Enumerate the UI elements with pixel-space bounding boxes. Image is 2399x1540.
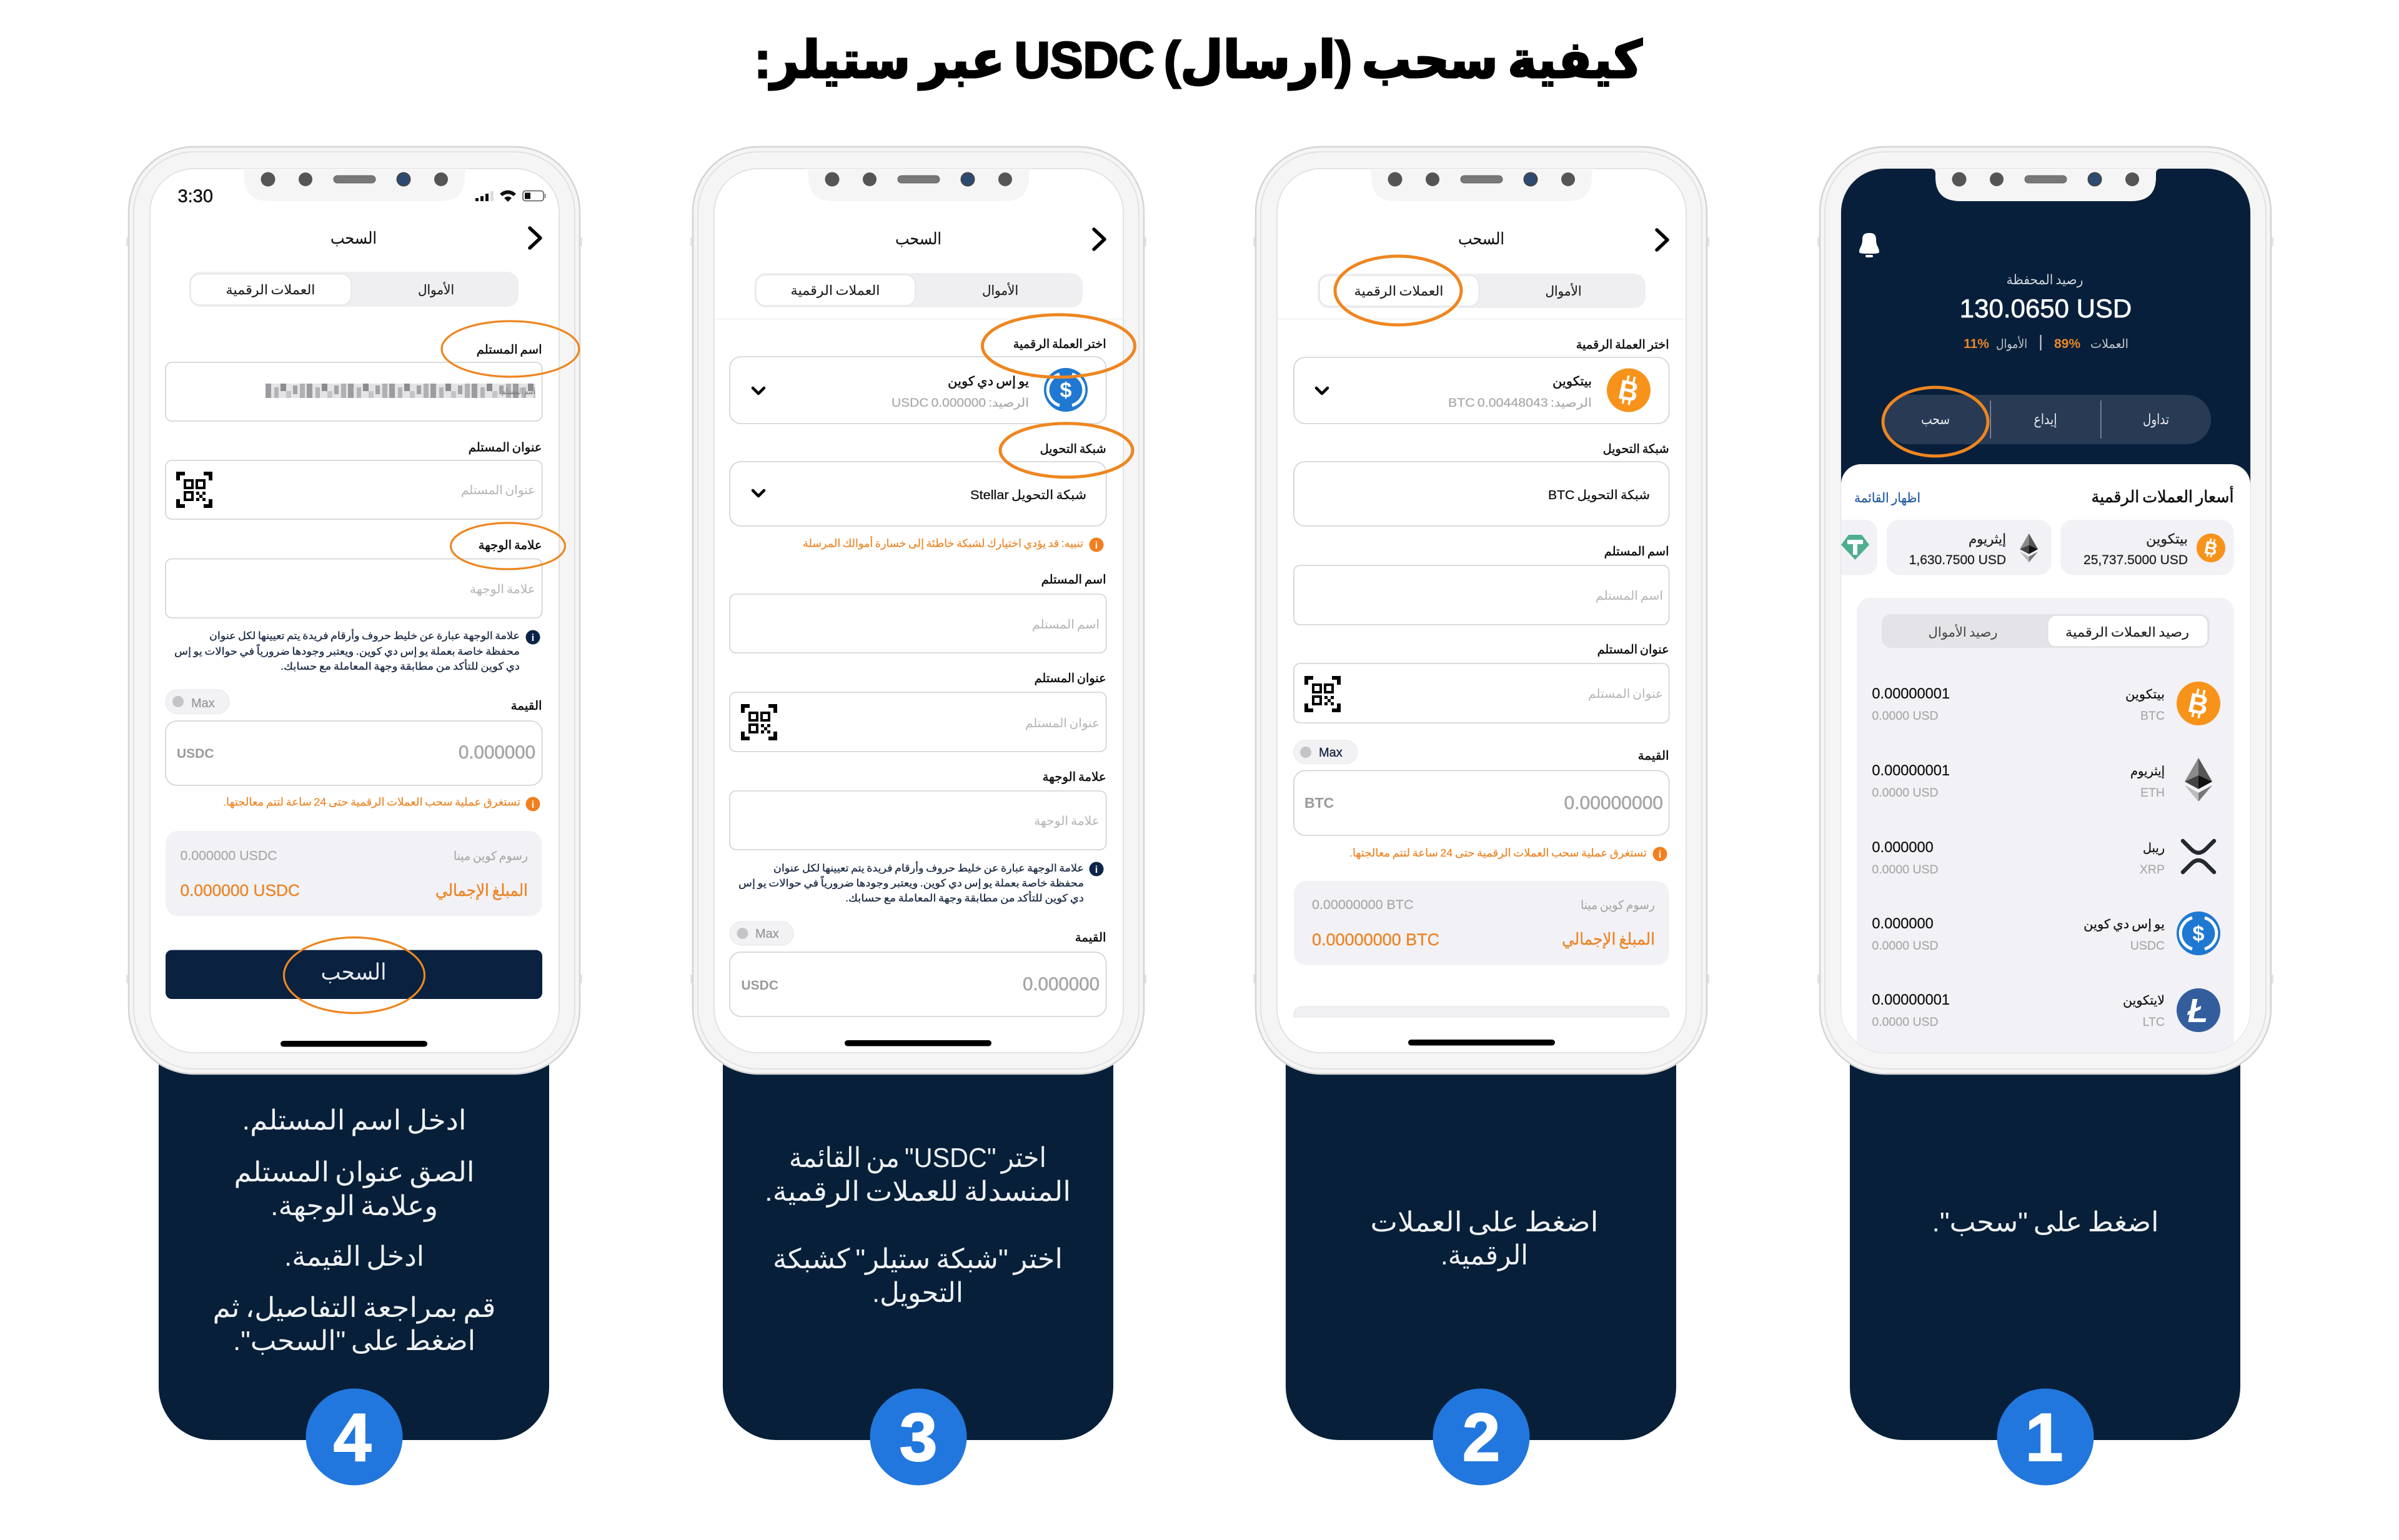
- phone frame: [1253, 147, 1709, 1074]
- balance tabs: رصيد العملات الرقمية: [2065, 625, 2189, 640]
- fee summary box: رسوم كوين مينا: [454, 850, 528, 863]
- field: destination tag: [166, 539, 542, 618]
- row: litecoin: 0.00000001: [1872, 992, 1950, 1008]
- field: recipient name with pixelated value: [166, 343, 542, 421]
- action buttons pill: تداول: [2143, 411, 2169, 428]
- phone frame: [126, 147, 582, 1074]
- field: recipient name with pixelated value: اسم المستلم: [477, 343, 542, 357]
- tab switch: العملات الرقمية: [226, 283, 315, 297]
- field: amount: BTC: [1304, 795, 1334, 811]
- field: network: شبكة التحويل: [1603, 442, 1669, 456]
- panel: step 2 caption: [1286, 1000, 1676, 1440]
- field: recipient address: عنوان المستلم: [1597, 643, 1669, 657]
- number badge 1: [1997, 1388, 2094, 1486]
- balance tabs: رصيد الأموال: [1928, 624, 1998, 640]
- field: select crypto: الرصيد: 0.00448043 BTC: [1448, 397, 1592, 410]
- panel: step 3 caption: [723, 1000, 1113, 1440]
- field: recipient address: عنوان المستلم: [461, 484, 535, 497]
- destination tag info note: علامة الوجهة عبارة عن خليط حروف وأرقام فريدة يتم تعيينها لكل عنوان: [773, 861, 1084, 875]
- caption text step 4: ادخل القيمة.: [284, 1241, 424, 1272]
- row: ripple: XRP: [2140, 863, 2165, 877]
- highlight ellipse: withdraw: [1883, 387, 1988, 456]
- allocation row: العملات: [2090, 337, 2128, 351]
- panel: step 1 caption: [1850, 1000, 2240, 1440]
- warning note: i: [1095, 540, 1098, 551]
- row: bitcoin: 0.0000 USD: [1872, 709, 1939, 723]
- row: bitcoin: بيتكوين: [2125, 687, 2165, 702]
- caption text step 3: اختر "USDC" من القائمة: [789, 1143, 1046, 1174]
- allocation row: 89%: [2054, 337, 2080, 351]
- notch with camera and speaker: [1366, 169, 1597, 201]
- dark wallet header background: [1841, 169, 2250, 494]
- field: recipient name: [1294, 545, 1669, 625]
- step 1 group: [1817, 147, 2273, 1486]
- row: bitcoin: [1872, 682, 2220, 725]
- tab switch: [755, 273, 1083, 307]
- field: destination tag: علامة الوجهة: [479, 539, 542, 552]
- field: recipient name: اسم المستلم: [1032, 618, 1100, 632]
- price card ethereum: إيثريوم: [1969, 531, 2006, 547]
- max toggle: Max: [191, 697, 215, 710]
- field: recipient name: اسم المستلم: [1604, 545, 1669, 559]
- icon: bitcoin: [2177, 682, 2220, 725]
- number badge 1: 1: [2025, 1399, 2063, 1476]
- back arrow: [1657, 230, 1667, 250]
- allocation row: الأموال: [1996, 336, 2027, 351]
- field: amount: 0.00000000: [1564, 793, 1663, 813]
- icon: ethereum: [2185, 758, 2212, 802]
- row: ripple: 0.000000: [1872, 840, 1934, 856]
- tab switch: الأموال: [418, 282, 454, 297]
- title: كيفية سحب (ارسال) USDC عبر ستيلر:: [755, 32, 1642, 90]
- fee summary box: 0.00000000 BTC: [1312, 897, 1414, 912]
- field: recipient address: عنوان المستلم: [1035, 672, 1106, 685]
- screen: wallet home: [1841, 169, 2250, 1085]
- caption text step 2: الرقمية.: [1441, 1240, 1528, 1271]
- field: destination tag: علامة الوجهة: [1034, 815, 1100, 828]
- row: ethereum: ETH: [2140, 786, 2165, 800]
- max toggle: Max: [1319, 746, 1343, 760]
- caption text step 4: ادخل اسم المستلم.: [242, 1105, 466, 1136]
- fee summary box: المبلغ الإجمالي: [435, 881, 528, 900]
- icon: bitcoin: B: [2185, 687, 2211, 722]
- caption text step 4: الصق عنوان المستلم: [234, 1157, 475, 1188]
- row: litecoin: 0.0000 USD: [1872, 1015, 1939, 1029]
- tab switch: العملات الرقمية: [791, 284, 880, 298]
- home indicator: [845, 1040, 991, 1046]
- icon: usdc: $: [2193, 922, 2205, 946]
- field: recipient address: عنوان المستلم: [1025, 717, 1100, 730]
- home indicator: [281, 1041, 427, 1047]
- warning note: تستغرق عملية سحب العملات الرقمية حتى 24 ساعة لتتم معالجتها.: [223, 796, 520, 808]
- field: destination tag: علامة الوجهة: [1043, 770, 1106, 784]
- field: network: شبكة التحويل: [1040, 442, 1106, 456]
- tab switch: العملات الرقمية: [1354, 284, 1443, 299]
- icon: xrp: [2183, 841, 2214, 872]
- field: amount: [1294, 749, 1669, 835]
- field: select crypto: اختر العملة الرقمية: [1013, 337, 1106, 351]
- field: select crypto: [730, 337, 1106, 424]
- warning note: تستغرق عملية سحب العملات الرقمية حتى 24 ساعة لتتم معالجتها.: [1349, 847, 1647, 860]
- icon: bitcoin small: B: [2202, 538, 2219, 560]
- caption text step 3: التحويل.: [872, 1278, 963, 1309]
- field: network: [730, 442, 1106, 526]
- field: amount: 0.000000: [1023, 974, 1100, 995]
- max toggle: [1294, 740, 1358, 763]
- caption text step 2: [1371, 1207, 1598, 1271]
- destination tag info note: علامة الوجهة عبارة عن خليط حروف وأرقام فريدة يتم تعيينها لكل عنوان: [209, 628, 520, 642]
- field: select crypto: اختر العملة الرقمية: [1576, 338, 1669, 352]
- price card bitcoin: بيتكوين: [2146, 531, 2188, 547]
- white lower sheet: [1841, 464, 2250, 1064]
- row: ripple: 0.0000 USD: [1872, 863, 1939, 877]
- number badge 2: [1433, 1388, 1529, 1486]
- price card ethereum: [1887, 520, 2052, 575]
- max toggle: [166, 690, 229, 713]
- caption text step 3: المنسدلة للعملات الرقمية.: [765, 1176, 1071, 1208]
- field: destination tag: [730, 770, 1106, 850]
- field: network: شبكة التحويل Stellar: [970, 488, 1086, 502]
- tab switch: [189, 272, 519, 307]
- fee summary box: [1294, 881, 1669, 965]
- destination tag info note: محفظة خاصة بعملة يو إس دي كوين. ويعتبر وجودها ضرورياً في حوالات يو إس: [738, 875, 1084, 890]
- field: amount: [730, 931, 1106, 1016]
- price card bitcoin: 25,737.5000 USD: [2084, 553, 2188, 567]
- tab switch: الأموال: [982, 282, 1018, 298]
- highlight ellipse: destination tag: [451, 523, 565, 569]
- destination tag info note: محفظة خاصة بعملة يو إس دي كوين. ويعتبر وجودها ضرورياً في حوالات يو إس: [174, 643, 520, 658]
- notch with camera and speaker: [239, 169, 470, 201]
- row: ethereum: 0.00000001: [1872, 763, 1950, 779]
- field: network: [1294, 442, 1669, 526]
- max toggle: Max: [755, 927, 779, 941]
- field: recipient address: [730, 672, 1106, 752]
- price card tether (clipped): [1841, 520, 1877, 575]
- highlight ellipse: network: [1000, 424, 1133, 477]
- wallet balance amount: 130.0650 USD: [1960, 294, 2132, 323]
- back arrow: [530, 228, 540, 248]
- fee summary box: المبلغ الإجمالي: [1562, 930, 1655, 949]
- field: recipient name with pixelated value: اسم المستلم: [502, 386, 535, 397]
- row: ethereum: [1872, 758, 2212, 802]
- caption text step 4: قم بمراجعة التفاصيل، ثم: [212, 1293, 496, 1324]
- show list link: اظهار القائمة: [1854, 491, 1920, 505]
- caption text step 2: اضغط على العملات: [1371, 1207, 1598, 1238]
- row: ethereum: 0.0000 USD: [1872, 786, 1939, 800]
- step 3 group: [690, 147, 1146, 1486]
- row: usdc: 0.000000: [1872, 916, 1934, 932]
- warning note: i: [532, 800, 534, 810]
- panel: step 4 caption: [159, 1000, 549, 1440]
- row: usdc: يو إس دي كوين: [2084, 917, 2165, 932]
- action buttons pill: سحب: [1921, 411, 1950, 427]
- icon: litecoin: Ł: [2187, 992, 2208, 1030]
- row: usdc: USDC: [2130, 939, 2165, 953]
- number badge 4: [306, 1388, 402, 1486]
- number badge 4: 4: [334, 1399, 372, 1476]
- balance list background: [1857, 598, 2234, 1085]
- destination tag info note: [738, 861, 1103, 905]
- action buttons pill: إيداع: [2034, 411, 2057, 428]
- highlight ellipse: select crypto: [982, 315, 1135, 377]
- fee summary box: 0.000000 USDC: [180, 848, 277, 863]
- back arrow: [1094, 229, 1105, 249]
- row: ripple: ريبل: [2143, 841, 2165, 855]
- field: amount: [166, 699, 542, 785]
- field: recipient address: [166, 441, 542, 519]
- field: select crypto: [1294, 338, 1669, 424]
- icon: bitcoin: [1607, 369, 1651, 412]
- tab switch: الأموال: [1546, 283, 1582, 299]
- screen title: السحب: [1458, 229, 1504, 248]
- max toggle: [730, 922, 793, 945]
- row: bitcoin: 0.00000001: [1872, 686, 1950, 702]
- icon: bitcoin small: [2197, 534, 2225, 562]
- caption text step 3: [765, 1143, 1071, 1309]
- wallet balance label: رصيد المحفظة: [2007, 272, 2083, 287]
- icon: bell: [1859, 233, 1879, 257]
- field: network: شبكة التحويل BTC: [1548, 488, 1650, 502]
- action buttons pill: [1883, 395, 2211, 444]
- icon: litecoin: [2177, 988, 2220, 1032]
- notch with camera and speaker: [803, 169, 1034, 201]
- field: recipient address: عنوان المستلم: [469, 441, 542, 455]
- field: recipient name: اسم المستلم: [1041, 573, 1106, 587]
- field: amount: 0.000000: [459, 742, 535, 763]
- fee summary box: [166, 831, 542, 916]
- icon: usdc: [1044, 368, 1088, 412]
- notch with camera and speaker: [1930, 169, 2161, 201]
- field: recipient address: عنوان المستلم: [1588, 687, 1663, 701]
- allocation row: [1964, 335, 2128, 351]
- field: amount: القيمة: [1075, 931, 1106, 945]
- row: ethereum: إيثريوم: [2130, 764, 2165, 779]
- phone frame: [690, 147, 1146, 1074]
- destination tag info note: دي كوين للتأكد من مطابقة وجهة المعاملة مع حسابك.: [845, 891, 1084, 905]
- caption text step 3: اختر "شبكة ستيلر" كشبكة: [773, 1244, 1063, 1275]
- warning note: تنبيه: قد يؤدي اختيارك لشبكة خاطئة إلى خسارة أموالك المرسلة: [803, 536, 1083, 550]
- balance tabs: [1882, 614, 2210, 648]
- icon: bitcoin: B: [1616, 374, 1641, 408]
- step 2 group: [1253, 147, 1709, 1486]
- step 4 group: [126, 147, 582, 1486]
- price card ethereum: 1,630.7500 USD: [1909, 553, 2006, 567]
- fee summary box: 0.00000000 BTC: [1312, 930, 1439, 949]
- field: select crypto: بيتكوين: [1552, 374, 1592, 389]
- field: recipient name: اسم المستلم: [1596, 589, 1663, 603]
- caption text step 4: [212, 1105, 496, 1356]
- row: litecoin: لايتكوين: [2123, 993, 2165, 1008]
- caption text step 4: اضغط على "السحب".: [233, 1326, 475, 1356]
- destination tag info note: دي كوين للتأكد من مطابقة وجهة المعاملة مع حسابك.: [281, 659, 520, 673]
- partly hidden button: [1294, 1006, 1669, 1017]
- fee summary box: 0.000000 USDC: [180, 881, 300, 900]
- number badge 2: 2: [1463, 1399, 1500, 1476]
- price card bitcoin: [2060, 520, 2234, 575]
- home indicator: [1408, 1040, 1555, 1046]
- warning note: i: [1659, 850, 1661, 860]
- row: litecoin: [1872, 988, 2220, 1032]
- row: usdc: 0.0000 USD: [1872, 939, 1939, 953]
- tab switch: [1318, 274, 1646, 308]
- field: destination tag: علامة الوجهة: [470, 583, 535, 597]
- field: amount: القيمة: [511, 699, 542, 713]
- allocation row: 11%: [1964, 337, 1989, 351]
- row: bitcoin: BTC: [2140, 709, 2165, 723]
- icon: usdc: $: [1060, 379, 1072, 402]
- status bar: 3:30: [177, 187, 213, 207]
- caption text step 4: وعلامة الوجهة.: [271, 1191, 438, 1222]
- field: recipient name: [730, 573, 1106, 653]
- screen title: السحب: [330, 229, 377, 247]
- row: ripple: [1872, 840, 2214, 877]
- number badge 3: 3: [900, 1399, 937, 1476]
- phone frame: [1817, 147, 2273, 1074]
- field: select crypto: يو إس دي كوين: [948, 374, 1029, 389]
- status bar: [177, 187, 546, 207]
- caption text step 1: اضغط على "سحب".: [1932, 1207, 2159, 1238]
- fee summary box: رسوم كوين مينا: [1581, 899, 1655, 912]
- highlight ellipse: recipient name: [442, 321, 579, 377]
- crypto prices heading: أسعار العملات الرقمية: [2092, 485, 2234, 507]
- highlight ellipse: withdraw button: [284, 937, 425, 1013]
- row: usdc: [1872, 912, 2220, 955]
- field: amount: القيمة: [1638, 749, 1669, 763]
- row: litecoin: LTC: [2143, 1015, 2165, 1029]
- withdraw button: [166, 950, 542, 999]
- destination tag info note: [174, 628, 540, 673]
- highlight ellipse: crypto tab: [1335, 256, 1461, 325]
- screen title: السحب: [895, 229, 941, 248]
- destination tag info note: i: [1095, 865, 1098, 875]
- field: recipient address: [1294, 643, 1669, 723]
- field: amount: USDC: [177, 747, 214, 761]
- field: amount: USDC: [741, 978, 778, 993]
- destination tag info note: i: [532, 633, 534, 643]
- field: select crypto: الرصيد: 0.000000 USDC: [892, 397, 1029, 410]
- withdraw button: السحب: [321, 959, 386, 985]
- number badge 3: [870, 1388, 967, 1486]
- icon: usdc: [2177, 912, 2220, 955]
